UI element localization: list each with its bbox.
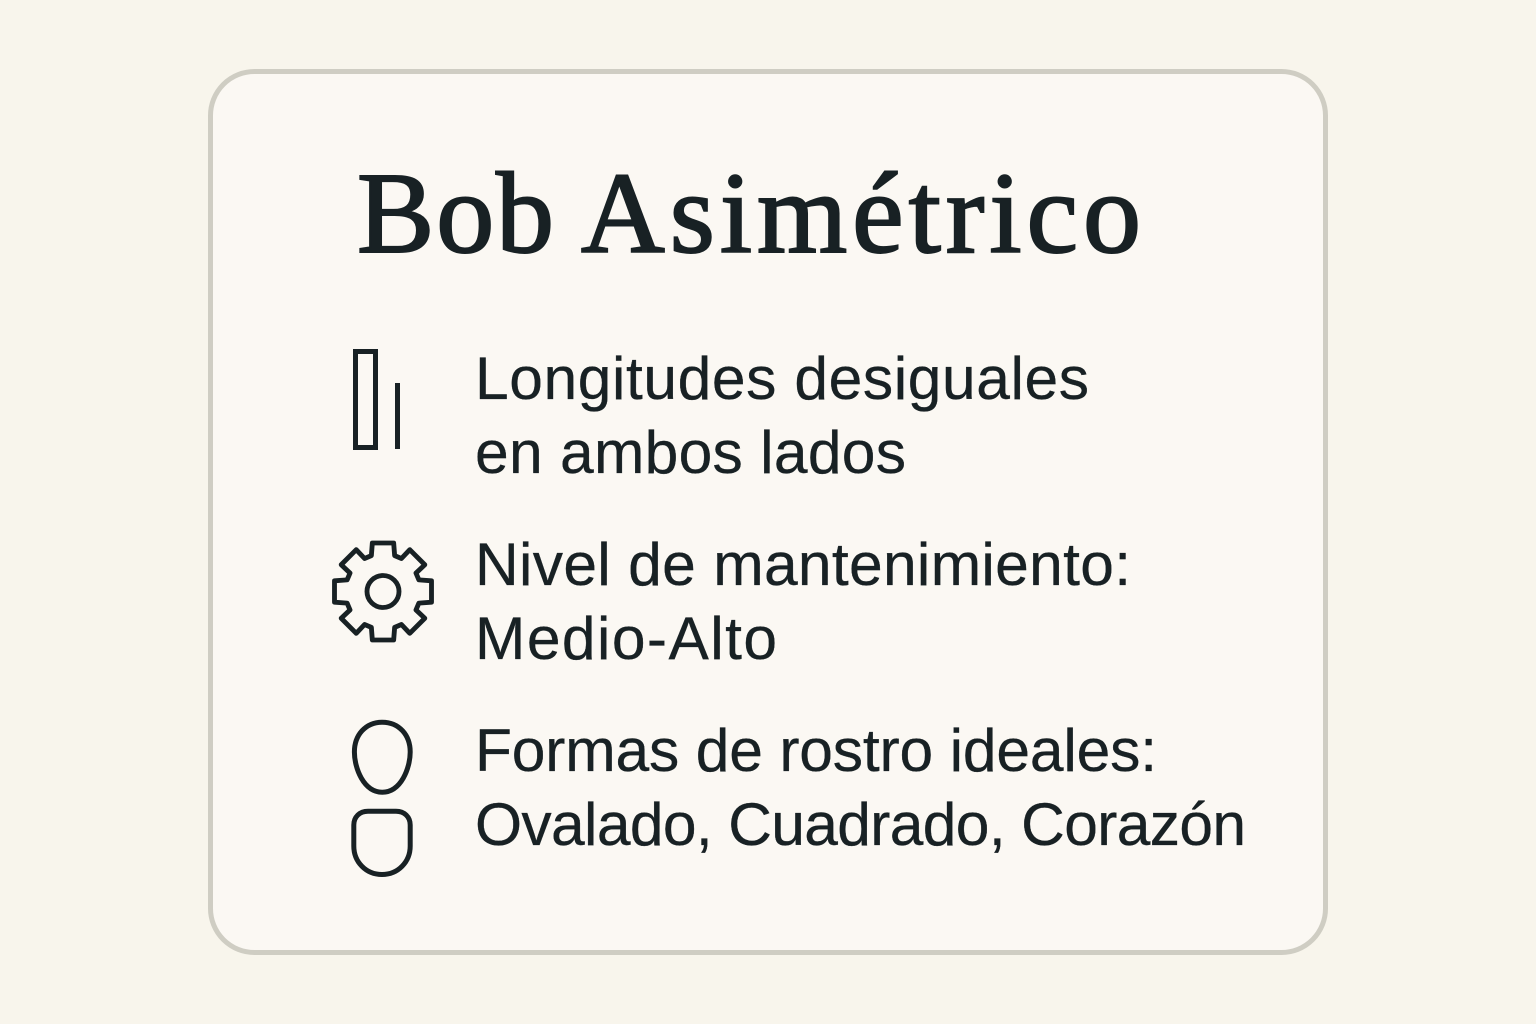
title: Bob (357, 150, 554, 278)
icon: uneven lengths (356, 352, 398, 449)
text block: uneven lengths: Longitudes desiguales (475, 344, 1089, 412)
icon: face shapes (354, 722, 410, 874)
title: Asimétrico (581, 150, 1141, 278)
text block: ideal face shapes: Formas de rostro ideales: (475, 716, 1157, 784)
panel: card (210, 72, 1326, 952)
text block: ideal face shapes: Ovalado, Cuadrado, Corazón (475, 790, 1246, 858)
text block: maintenance level: Nivel de mantenimiento: (475, 530, 1131, 598)
text block: maintenance level (475, 530, 1131, 672)
text block: ideal face shapes (475, 716, 1246, 858)
text block: uneven lengths (475, 344, 1089, 486)
text block: uneven lengths: en ambos lados (475, 418, 906, 486)
icon: gear (334, 543, 432, 640)
text block: maintenance level: Medio-Alto (475, 604, 777, 672)
